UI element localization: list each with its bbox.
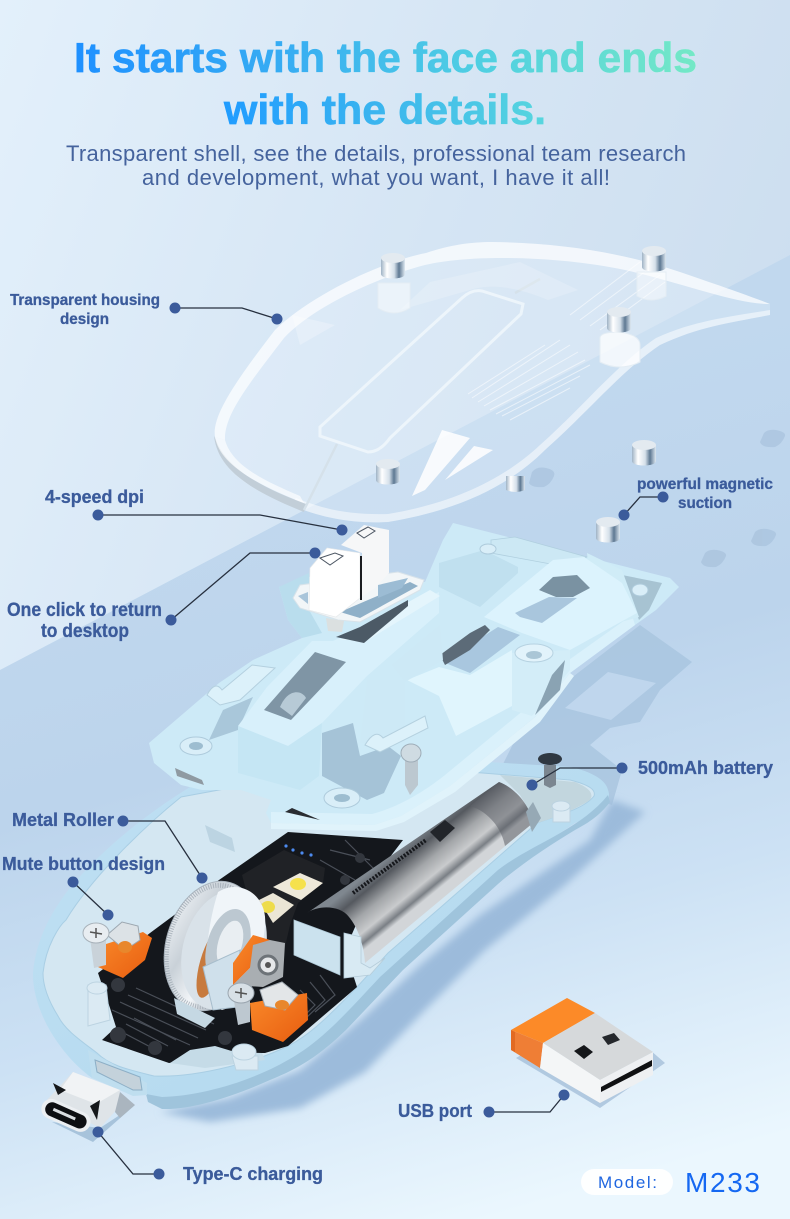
black chip	[242, 850, 325, 960]
front button	[309, 548, 360, 617]
panel: inner bracket	[149, 523, 679, 831]
wheel bracket base	[174, 998, 215, 1028]
shell button cutout	[320, 291, 523, 452]
callout: magnets: suction	[678, 495, 732, 512]
wheel orange gear	[191, 925, 231, 1001]
bracket ridge top	[238, 592, 439, 746]
panel: metal roller	[150, 870, 280, 1028]
callout: battery	[526, 758, 773, 790]
bracket left window	[264, 652, 346, 720]
blue LEDs	[284, 844, 313, 857]
callout: metal roller: Metal Roller	[12, 810, 114, 830]
callout: transparent housing: design	[60, 311, 109, 328]
bracket arch hole	[539, 575, 590, 597]
panel: type-c connector	[38, 1072, 135, 1142]
shell streaks	[468, 262, 665, 420]
bracket rear arch	[484, 557, 637, 650]
rear button	[341, 525, 389, 598]
rubber frame	[293, 572, 424, 622]
panel: orange encoder	[233, 935, 285, 987]
panel: dpi buttons	[293, 525, 424, 632]
case inner floor	[43, 772, 594, 1076]
bracket button window	[336, 600, 408, 643]
callout: mute button: Mute button design	[2, 854, 165, 874]
subtitle	[66, 141, 686, 190]
bracket ridge connector	[392, 625, 443, 682]
case rear floor shade	[500, 775, 591, 823]
bracket screw bosses	[180, 544, 648, 808]
bracket right hump	[407, 650, 512, 736]
wheel knurl ticks	[153, 875, 267, 1017]
bracket rear recess	[622, 575, 662, 620]
panel: transparent shell	[214, 242, 770, 522]
subtitle: and development, what you want, I have it all!	[142, 165, 610, 190]
button gap	[360, 556, 362, 600]
shell reflections	[292, 262, 578, 496]
case outer rim	[33, 758, 609, 1103]
shell body	[215, 242, 770, 522]
callout: usb port: USB port	[398, 1101, 472, 1121]
subtitle: Transparent shell, see the details, professional team research	[66, 141, 686, 166]
panel: electronics	[98, 832, 403, 1068]
switch cap	[260, 982, 298, 1010]
callout: mute button	[2, 854, 165, 920]
wheel second ring	[168, 880, 280, 1020]
case wall tabs	[205, 825, 235, 852]
model badge: Model:	[598, 1173, 657, 1192]
callout: 4-speed dpi	[45, 487, 348, 536]
wheel bracket	[203, 950, 240, 1010]
bracket dark gear	[440, 625, 490, 665]
callout: desktop button: to desktop	[41, 621, 129, 642]
yellow button pads	[259, 873, 323, 923]
floor shadow blobs	[529, 430, 785, 567]
board pads	[110, 853, 365, 1055]
wheel inner gray	[197, 904, 259, 988]
callout: type-c	[92, 1126, 323, 1184]
battery holders	[294, 920, 340, 975]
connector shadow	[52, 1105, 135, 1142]
case USB-C port	[88, 1050, 147, 1096]
bracket right post	[512, 650, 570, 716]
callout: type-c: Type-C charging	[183, 1164, 323, 1184]
metal end	[600, 1052, 653, 1103]
shadow: bracket on floor	[500, 625, 692, 805]
orange block	[250, 993, 308, 1042]
wheel face	[207, 887, 265, 1010]
bracket slot	[515, 597, 577, 623]
callout: magnets: powerful magnetic	[637, 476, 773, 493]
icon: battery screw	[538, 753, 562, 788]
panel: lower case	[33, 758, 610, 1109]
panel: case posts	[87, 801, 570, 1070]
model badge: M233	[685, 1167, 760, 1198]
shell button seam	[304, 279, 540, 510]
battery icons	[430, 820, 455, 842]
connector pins	[115, 1092, 135, 1118]
shell gray left edge	[214, 436, 306, 512]
callout: usb port	[398, 1090, 570, 1121]
battery body	[307, 782, 533, 963]
case floor notch	[170, 1046, 265, 1068]
shell pillars	[378, 272, 666, 367]
title: with the details.	[223, 86, 546, 133]
bracket front block	[238, 723, 322, 790]
callout: desktop button	[7, 548, 320, 642]
orange top	[511, 998, 595, 1043]
shadow: lower case	[160, 800, 645, 1122]
bracket lip	[271, 615, 635, 825]
bracket rear plate	[439, 550, 518, 607]
shell top rim	[215, 242, 770, 440]
floor plane	[0, 255, 790, 1219]
bracket feet	[175, 768, 204, 785]
bracket lip lower	[271, 673, 574, 831]
case lower shade	[146, 795, 610, 1109]
wheel outer knurl	[150, 870, 274, 1022]
dongle shadow	[516, 1050, 665, 1108]
metal top	[543, 1013, 653, 1080]
bracket left recess	[209, 697, 253, 740]
bracket silhouette	[149, 523, 679, 825]
bracket center recess	[322, 723, 401, 800]
callout: magnets	[618, 476, 773, 520]
title: It starts with the face and ends	[74, 34, 697, 81]
battery end shade	[470, 782, 533, 846]
button stem	[326, 618, 344, 632]
orange front	[511, 1030, 543, 1068]
callout: 4-speed dpi: 4-speed dpi	[45, 487, 144, 507]
bracket mid column	[360, 680, 405, 743]
metal side	[540, 1043, 600, 1103]
connector top highlight	[60, 1072, 120, 1104]
panel: left mute switch	[83, 922, 152, 978]
switch cap	[107, 922, 140, 950]
panel: usb dongle	[511, 998, 665, 1108]
connector mouth	[38, 1096, 94, 1135]
panel: battery	[294, 782, 541, 978]
screw	[233, 995, 250, 1025]
callout: desktop button: One click to return	[7, 600, 162, 621]
bracket left block	[279, 573, 322, 638]
callout: metal roller	[12, 810, 208, 884]
connector body	[47, 1072, 120, 1128]
callout: transparent housing	[10, 292, 282, 328]
battery barcode	[353, 840, 426, 893]
callout: battery: 500mAh battery	[638, 758, 773, 778]
screw	[90, 938, 106, 968]
title	[74, 34, 697, 133]
circuit traces	[112, 840, 375, 1052]
bracket center window	[443, 627, 520, 673]
usb holes	[574, 1045, 593, 1059]
bracket rear right	[587, 553, 639, 625]
shell lower rim	[290, 310, 770, 522]
model badge	[581, 1167, 760, 1198]
circuit board	[98, 832, 403, 1063]
icon: magnets	[376, 246, 666, 542]
callout: transparent housing: Transparent housing	[10, 292, 160, 309]
panel: right mute switch	[228, 982, 308, 1042]
bracket clips	[207, 665, 428, 752]
bracket strip	[340, 590, 440, 640]
connector legs	[53, 1083, 100, 1120]
bracket right dark	[535, 660, 565, 715]
metal screw	[405, 760, 418, 795]
orange block	[98, 932, 152, 978]
bracket rear top	[491, 537, 587, 567]
